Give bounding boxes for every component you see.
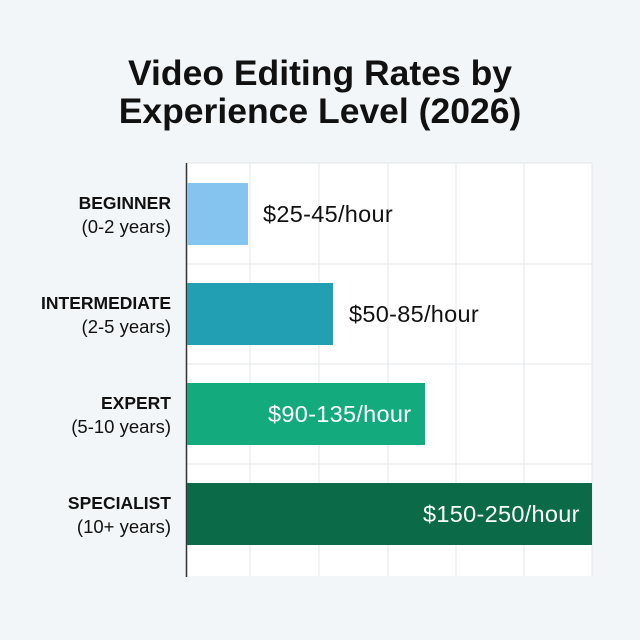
label: beginner: BEGINNER	[79, 193, 171, 213]
bar: intermediate	[187, 283, 333, 345]
label: specialist: SPECIALIST	[68, 493, 171, 513]
label: specialist	[68, 493, 171, 537]
value: specialist: $150-250/hour	[423, 501, 580, 527]
label: intermediate	[41, 293, 171, 337]
label: expert: EXPERT	[101, 393, 171, 413]
label: expert: (5-10 years)	[71, 416, 171, 437]
title: Experience Level (2026)	[119, 91, 521, 131]
value: beginner: $25-45/hour	[263, 201, 393, 227]
label: expert	[71, 393, 171, 437]
title: Video Editing Rates by	[128, 53, 512, 93]
bar: beginner	[187, 183, 248, 245]
title	[119, 53, 521, 131]
bar: expert	[187, 383, 425, 445]
label: beginner	[79, 193, 171, 237]
bar: specialist	[187, 483, 592, 545]
label: intermediate: INTERMEDIATE	[41, 293, 171, 313]
label: specialist: (10+ years)	[77, 516, 171, 537]
label: intermediate: (2-5 years)	[82, 316, 171, 337]
value: expert: $90-135/hour	[268, 401, 411, 427]
label: beginner: (0-2 years)	[82, 216, 171, 237]
value: intermediate: $50-85/hour	[349, 301, 479, 327]
